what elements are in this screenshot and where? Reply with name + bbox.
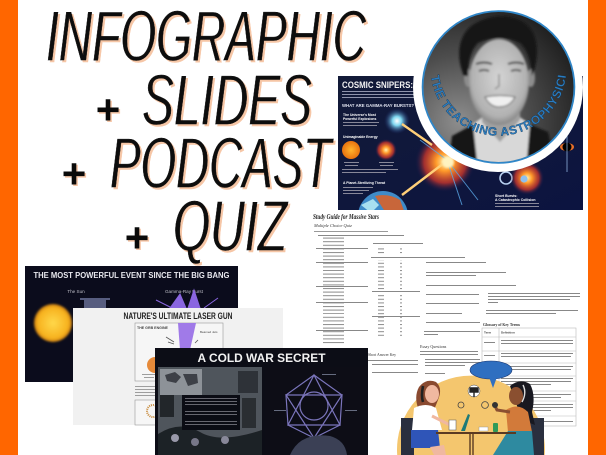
slide: most powerful event xyxy=(25,266,238,382)
panel: podcast illustration xyxy=(397,361,545,455)
diagram label: THE GRB ENGINE xyxy=(137,326,169,330)
title: infographic + slides + podcast + quiz: SLIDES xyxy=(142,61,312,141)
green cup xyxy=(493,423,498,432)
quiz question column one xyxy=(316,235,404,345)
glossary table: Term xyxy=(484,330,491,334)
mug xyxy=(449,420,456,430)
war room image xyxy=(158,367,262,455)
glossary table: Definition xyxy=(501,330,515,334)
slide heading: THE MOST POWERFUL EVENT SINCE THE BIG BANG xyxy=(34,271,230,280)
poster section: most powerful explosions xyxy=(343,113,379,126)
jacket xyxy=(450,124,551,159)
nose shadow xyxy=(495,74,499,89)
title: infographic + slides + podcast + quiz xyxy=(46,0,369,269)
poster section: most powerful explosions: Powerful Explosions xyxy=(343,117,376,121)
title: infographic + slides + podcast + quiz: SLIDES xyxy=(144,63,314,143)
neck xyxy=(481,112,522,142)
left chair xyxy=(401,418,414,455)
slide: nature's ultimate laser gun xyxy=(73,308,283,425)
portrait photo xyxy=(424,12,574,162)
poster section: planet-sterilizing threat: A Planet-Sterilizing Threat xyxy=(343,181,386,185)
essay prompts xyxy=(486,293,580,314)
icon: blue star xyxy=(385,109,409,133)
orange star core xyxy=(147,357,163,373)
sun label: The Sun xyxy=(67,289,85,294)
poster section: short bursts: A Catastrophic Collision xyxy=(495,198,536,202)
tablet xyxy=(461,414,470,431)
poster intro lines xyxy=(342,91,414,98)
ears xyxy=(464,69,472,87)
poster heading: COSMIC SNIPERS: xyxy=(342,80,413,91)
right chair xyxy=(530,418,544,455)
poster section: most powerful explosions: The Universe's Most xyxy=(343,113,377,117)
right orange border xyxy=(588,0,606,455)
black hole illustration xyxy=(560,136,574,172)
title: infographic + slides + podcast + quiz: QUIZ xyxy=(173,187,288,267)
smile xyxy=(485,96,515,107)
panel: cosmic snipers infographic xyxy=(338,76,583,210)
brows xyxy=(476,62,524,64)
eyes xyxy=(479,70,521,71)
title: infographic + slides + podcast + quiz: PODCAST xyxy=(112,126,336,206)
title: infographic + slides + podcast + quiz: + xyxy=(96,86,120,133)
portrait badge xyxy=(413,10,583,172)
title: infographic + slides + podcast + quiz: + xyxy=(63,152,88,198)
answer key heading: Short Answer Key xyxy=(368,353,396,357)
title: infographic + slides + podcast + quiz: QUIZ xyxy=(175,189,290,269)
table leg xyxy=(470,434,473,455)
glossary heading: Glossary of Key Terms xyxy=(483,323,521,327)
white badge backing xyxy=(413,2,583,172)
title: infographic + slides + podcast + quiz: INFOGRAPHIC xyxy=(48,0,369,79)
essay questions heading: Essay Questions xyxy=(420,344,447,349)
slide heading: A COLD WAR SECRET xyxy=(198,353,326,365)
central explosion with jets xyxy=(402,124,478,205)
short answer questions xyxy=(424,262,516,335)
poster subheading: WHAT ARE GAMMA-RAY BURSTS? xyxy=(342,103,414,108)
title: infographic + slides + podcast + quiz: + xyxy=(97,88,122,134)
blue ring xyxy=(423,12,574,162)
purple jet xyxy=(178,323,196,350)
hexagonal satellite diagram xyxy=(265,367,368,455)
multiple choice heading: Multiple Choice Quiz xyxy=(313,223,352,228)
diagram frame xyxy=(135,323,223,381)
right woman xyxy=(492,381,535,455)
earth illustration xyxy=(358,191,408,210)
slide: a cold war secret xyxy=(155,348,368,455)
text box xyxy=(182,395,240,430)
second diagram frame xyxy=(135,400,223,425)
title: infographic + slides + podcast + quiz: + xyxy=(125,214,149,261)
left orange border xyxy=(0,0,18,455)
jet caption: Beamed Jets xyxy=(200,330,218,334)
gamma-ray burst label: Gamma-Ray Burst xyxy=(165,289,204,294)
title: infographic + slides + podcast + quiz: PODCAST xyxy=(110,124,334,204)
sun burst icon xyxy=(147,405,159,417)
debris strokes xyxy=(166,337,198,344)
slide heading: NATURE'S ULTIMATE LASER GUN xyxy=(124,311,232,321)
face xyxy=(469,39,529,125)
gamma-ray burst beams xyxy=(156,290,218,308)
pillar icon xyxy=(80,298,110,308)
essay body lines xyxy=(420,351,480,374)
icon: red burst xyxy=(375,139,397,161)
icon: orange sun xyxy=(342,141,360,159)
table xyxy=(436,432,516,434)
answer key lines xyxy=(368,360,418,373)
sun illustration xyxy=(34,304,72,342)
poster section: short bursts: Short Bursts: xyxy=(495,194,517,198)
bowl xyxy=(479,427,488,431)
explanatory lines xyxy=(135,386,157,396)
neutron star merger illustration xyxy=(499,164,543,194)
speech bubble xyxy=(470,361,512,388)
hair xyxy=(459,16,537,76)
yellow circle xyxy=(397,376,545,455)
microphone icon xyxy=(468,385,480,397)
poster section: planet-sterilizing threat xyxy=(343,181,386,194)
panel: study guide document xyxy=(313,212,580,426)
instructions line xyxy=(314,231,388,232)
left woman xyxy=(411,381,456,455)
engine caption xyxy=(142,374,156,378)
glossary table xyxy=(482,328,576,426)
study guide title: Study Guide for Massive Stars xyxy=(313,212,379,221)
poster section: unimaginable energy: Unimaginable Energy xyxy=(343,135,378,139)
shirt xyxy=(473,116,530,170)
quiz question column two xyxy=(371,243,465,336)
podcast small icons xyxy=(458,402,488,408)
title: infographic + slides + podcast + quiz: + xyxy=(126,216,151,262)
title: infographic + slides + podcast + quiz: + xyxy=(62,150,86,197)
sun captions xyxy=(342,162,398,173)
poster section: short bursts xyxy=(495,194,539,207)
